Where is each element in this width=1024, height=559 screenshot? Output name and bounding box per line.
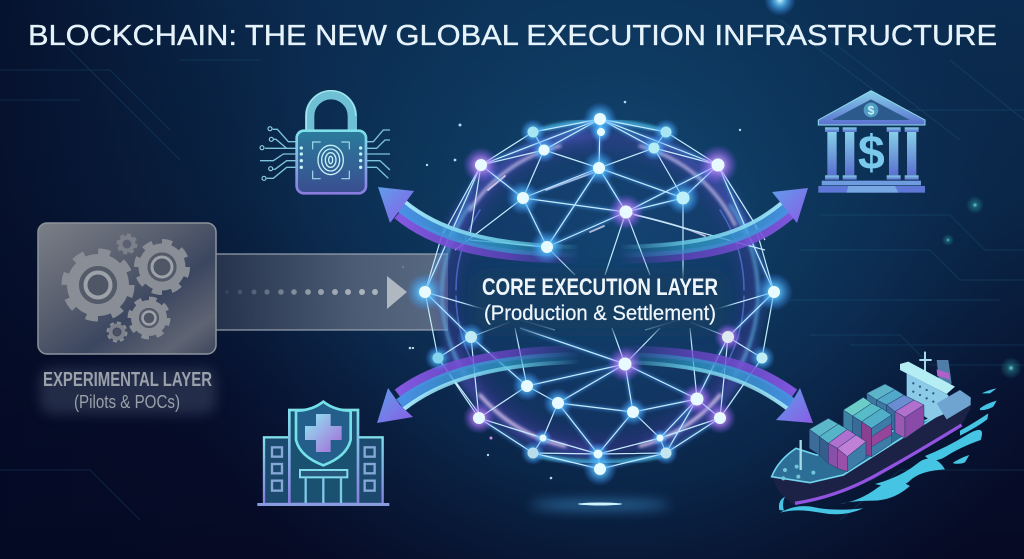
hull [772, 398, 971, 505]
icon: bank [818, 91, 925, 193]
icon: gears [65, 235, 187, 341]
glowing ring arcs [442, 121, 758, 462]
label: experimental layer [40, 368, 216, 414]
arrow: top right to bank [620, 188, 808, 258]
glass card [38, 223, 216, 354]
dark text backing [472, 272, 728, 332]
icon: padlock with fingerprint [260, 91, 390, 193]
label: core execution layer: CORE EXECUTION LAYER [482, 274, 718, 301]
arrows: outbound flows [377, 187, 813, 423]
label: experimental layer: EXPERIMENTAL LAYER [43, 369, 212, 391]
label: core execution layer: (Production & Settlement) [484, 302, 716, 325]
title: BLOCKCHAIN: THE NEW GLOBAL EXECUTION INFRASTRUCTURE [28, 20, 997, 52]
icon: container ship [772, 352, 997, 514]
superstructure [937, 360, 952, 390]
large dollar sign: $ [858, 126, 885, 180]
waves [779, 388, 997, 514]
panel: experimental layer [38, 223, 448, 414]
small dollar sign: $ [868, 103, 875, 117]
network nodes [406, 102, 793, 486]
arrow: top left to lock [378, 187, 580, 258]
network edges: glow [425, 119, 774, 469]
network edges [425, 119, 774, 469]
containers [809, 384, 924, 472]
icon: hospital with shield [257, 402, 389, 506]
arrow: bottom right to ship [620, 351, 813, 423]
arrow: bottom left to hospital [377, 351, 580, 423]
label: core execution layer [482, 274, 718, 325]
chart: core network sphere [425, 119, 774, 469]
label: experimental layer: (Pilots & POCs) [74, 392, 180, 412]
arrow band to core layer [216, 254, 448, 330]
deck [772, 398, 971, 483]
